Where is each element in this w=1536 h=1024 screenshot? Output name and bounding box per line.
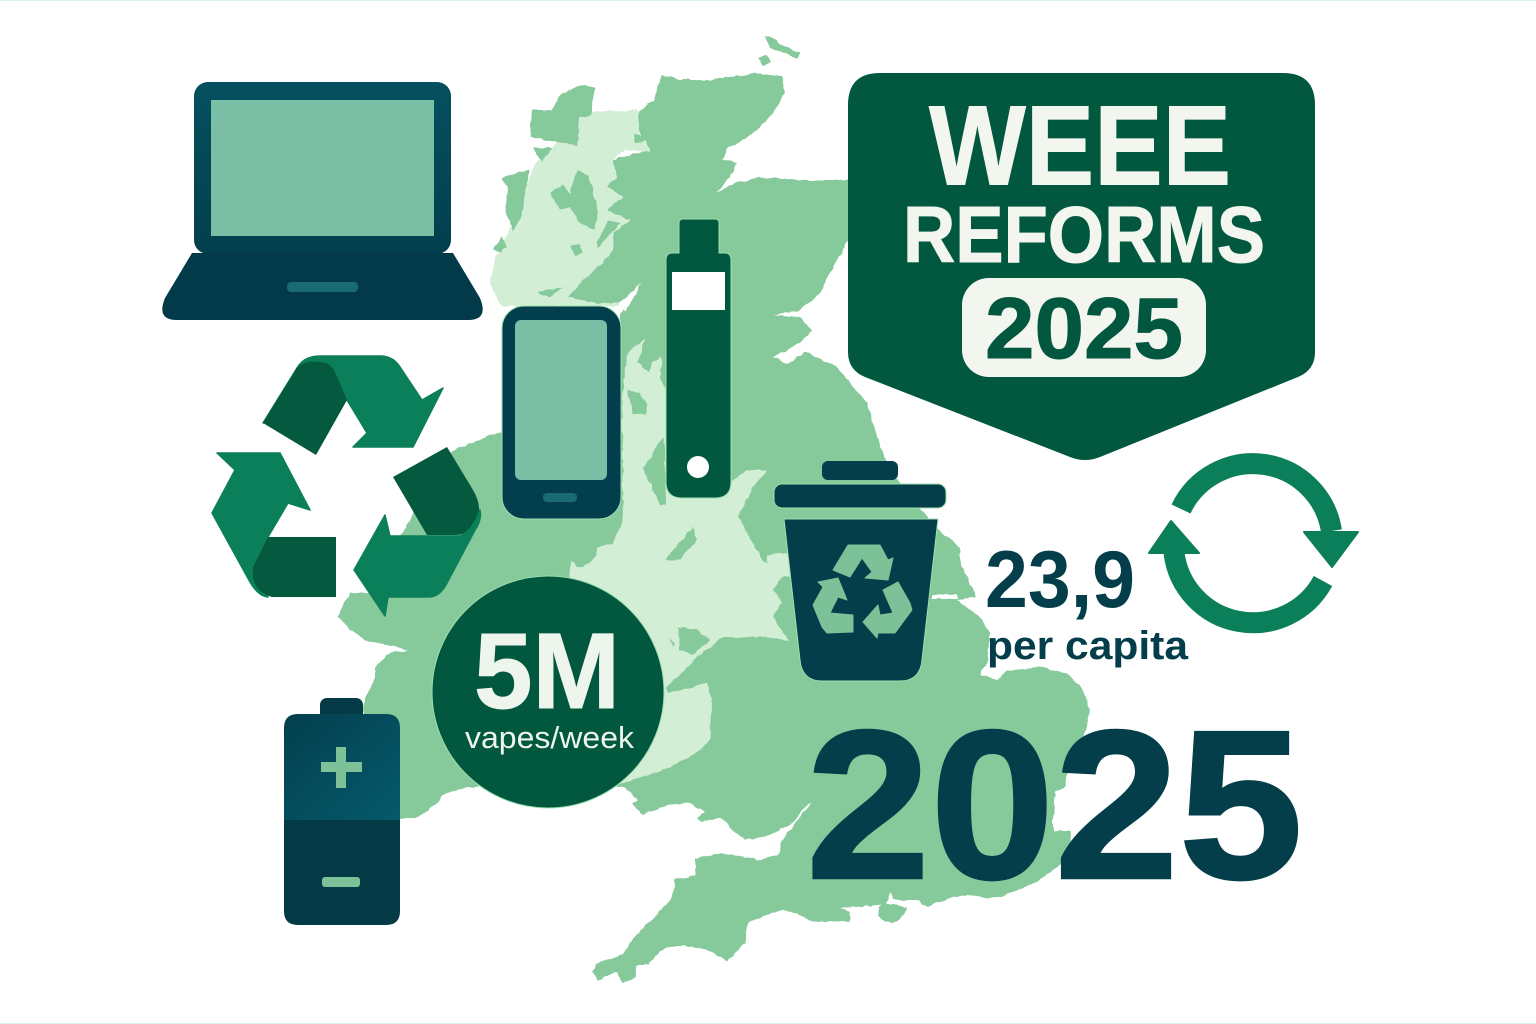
icon: circular arrows (1149, 464, 1358, 623)
stat: 23,9 per capita: 23,9 (985, 535, 1135, 625)
stat: 23,9 per capita: per capita (987, 624, 1189, 668)
icon: recycling symbol (212, 356, 480, 616)
icon: recycling bin (774, 461, 946, 681)
icon: laptop (162, 82, 483, 320)
title banner: WEEE (929, 82, 1231, 208)
icon: vape (666, 219, 731, 498)
icon: small recycling symbol on bin (813, 545, 912, 638)
callout: 5M vapes per week (432, 576, 664, 808)
large year 2025: 2025 (806, 686, 1303, 923)
icon: battery (284, 698, 400, 925)
icon: smartphone (502, 306, 621, 519)
callout: 5M vapes per week: vapes/week (465, 720, 635, 755)
callout: 5M vapes per week: 5M (474, 610, 620, 731)
map of the UK (337, 37, 1090, 983)
stat: 23,9 per capita (985, 535, 1189, 668)
title banner (848, 73, 1315, 460)
year pill: 2025 (985, 281, 1183, 377)
title banner: REFORMS (903, 190, 1265, 279)
